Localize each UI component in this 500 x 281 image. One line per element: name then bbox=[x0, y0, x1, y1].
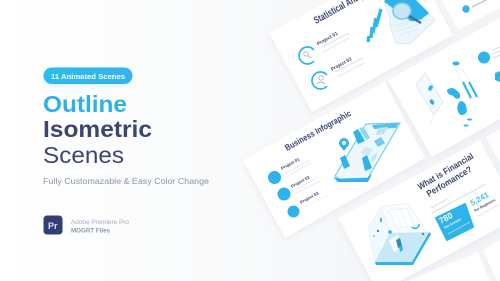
stat card: 780: 780 bbox=[437, 210, 455, 226]
badge: animated scenes pill bbox=[43, 68, 132, 86]
subtitle: Fully Customazable & Easy Color Change bbox=[43, 176, 209, 186]
stat card: 780 bbox=[436, 204, 473, 240]
text block bbox=[493, 47, 500, 58]
illustration: isometric room bbox=[368, 203, 431, 265]
panel: bottom right card bbox=[483, 240, 500, 281]
item: project 03 bbox=[288, 190, 328, 218]
stat card: 780: Per Annum bbox=[444, 217, 462, 230]
chart icon: rising bars bbox=[368, 9, 381, 42]
panel: business infographic bbox=[243, 82, 425, 238]
illustration: isometric phone city bbox=[333, 123, 400, 182]
title: outline: Outline bbox=[43, 91, 127, 117]
panel: bottom card bbox=[408, 252, 490, 281]
title: isometric: Isometric bbox=[43, 116, 152, 142]
item: project 01: Project 01 bbox=[280, 156, 301, 171]
icon: laptop with magnifier bbox=[384, 0, 435, 44]
heading: what is financial performance: What is Financial bbox=[416, 151, 475, 192]
stat card: 5,241: 5,241 bbox=[469, 190, 491, 208]
illustration: map scene bbox=[416, 62, 478, 126]
title: scenes: Scenes bbox=[43, 142, 124, 168]
item: project 01 bbox=[299, 31, 349, 64]
item: project 02 bbox=[278, 174, 320, 200]
badge: 01 bbox=[478, 52, 490, 64]
item: project 03: Project 03 bbox=[299, 190, 320, 205]
item: project 01: Project 01 bbox=[316, 31, 339, 47]
heading: business infographic: Business Infographic bbox=[283, 108, 353, 153]
item: project 01 bbox=[268, 156, 311, 184]
divider lines bbox=[431, 184, 486, 213]
panel: statistical analysis bbox=[269, 0, 453, 112]
item: project 02: Project 02 bbox=[290, 174, 311, 189]
panel: top right card bbox=[442, 0, 500, 30]
label: adobe premiere pro: Adobe Premiere Pro bbox=[71, 220, 130, 226]
panel: right edge card bbox=[486, 129, 500, 163]
icon: premiere pro: Pr bbox=[48, 221, 58, 231]
item: project 02: Project 02 bbox=[330, 56, 353, 73]
panel: financial performance bbox=[338, 140, 500, 281]
item: project 02 bbox=[312, 56, 364, 89]
stat card: 5,241: Per Beginners bbox=[474, 198, 496, 213]
icon: premiere pro bbox=[44, 216, 62, 234]
stat card: 5,241 bbox=[469, 190, 500, 224]
panel: map card bbox=[388, 18, 500, 157]
badge: animated scenes pill: 11 Animated Scenes bbox=[51, 72, 125, 81]
card shadows bbox=[243, 0, 500, 281]
small icon bbox=[495, 71, 500, 82]
heading: what is financial performance: Perfomance? bbox=[425, 164, 474, 199]
label: mogrt files: MOGRT Files bbox=[71, 228, 111, 234]
